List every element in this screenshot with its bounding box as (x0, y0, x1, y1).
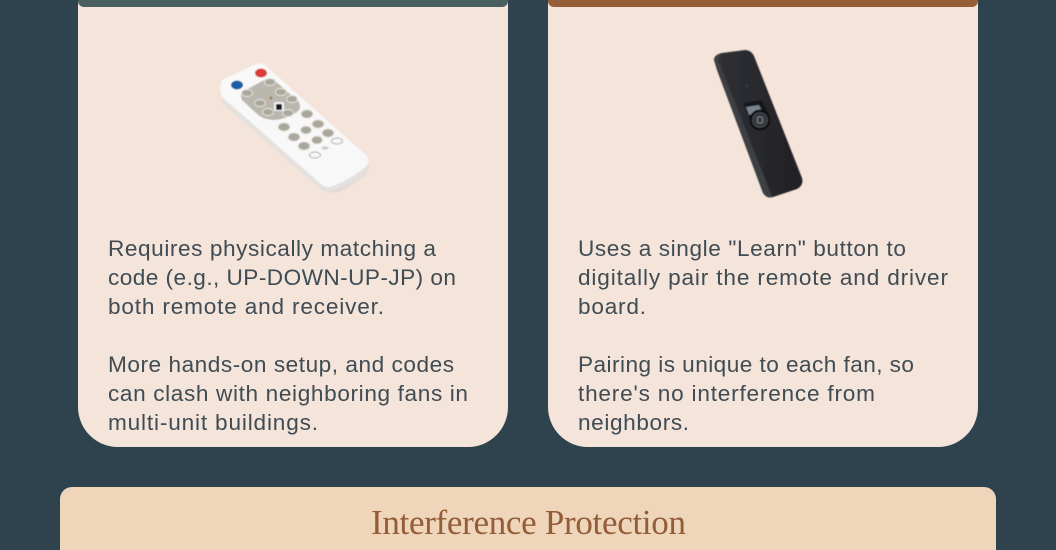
icon: black remote with display (714, 50, 802, 198)
card header strip (548, 0, 978, 7)
text block: DIP switch setup (108, 236, 456, 319)
text block: DIP switch drawbacks: can clash with neighboring fans in (108, 381, 468, 406)
text block: learn button benefits: Pairing is unique to each fan, so (578, 352, 914, 377)
text block: learn button benefits: there's no interference from (578, 381, 875, 406)
panel: DIP switch remote card (78, 0, 508, 447)
text block: DIP switch drawbacks: multi-unit buildings. (108, 410, 318, 435)
text block: DIP switch setup: Requires physically matching a (108, 236, 436, 261)
icon: white remote with keypad (220, 63, 368, 192)
text block: learn button pairing: board. (578, 294, 646, 319)
panel: interference protection (60, 487, 996, 550)
text block: learn button pairing: Uses a single "Learn" button to (578, 236, 906, 261)
text block: DIP switch setup: code (e.g., UP-DOWN-UP-JP) on (108, 265, 456, 290)
text block: DIP switch drawbacks (108, 352, 468, 435)
text block: learn button pairing (578, 236, 948, 319)
card header strip (78, 0, 508, 7)
text block: DIP switch drawbacks: More hands-on setup, and codes (108, 352, 454, 377)
text block: DIP switch setup: both remote and receiver. (108, 294, 384, 319)
text block: learn button benefits: neighbors. (578, 410, 689, 435)
heading: interference protection: Interference Protection (371, 503, 686, 542)
text block: learn button pairing: digitally pair the remote and driver (578, 265, 948, 290)
panel: learn button remote card (548, 0, 978, 447)
text block: learn button benefits (578, 352, 914, 435)
